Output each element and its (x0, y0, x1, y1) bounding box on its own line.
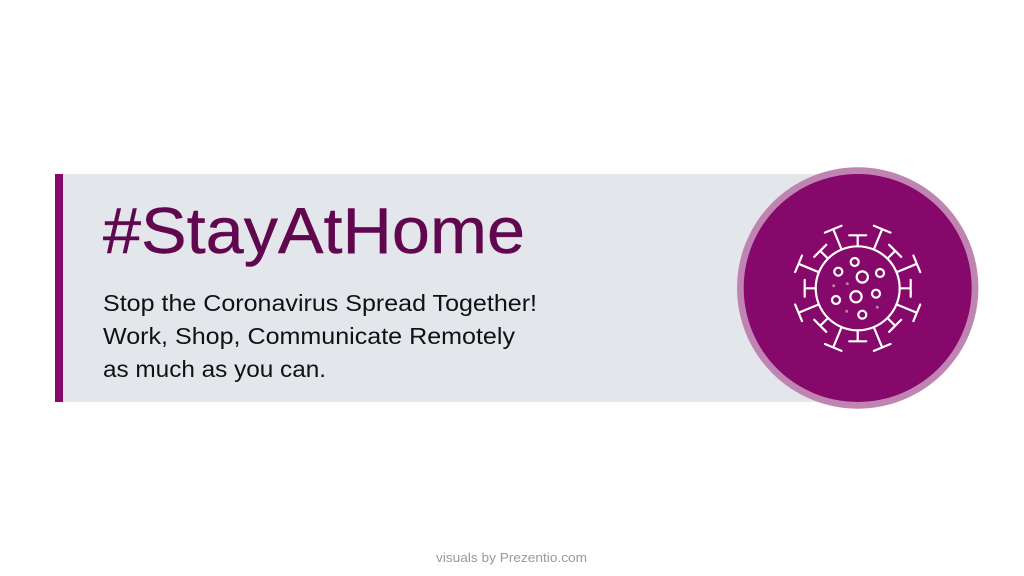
icon: coronavirus (795, 226, 920, 351)
accent bar (55, 174, 63, 402)
panel: banner background (55, 174, 860, 402)
icon: inner circle (744, 174, 972, 402)
title: #StayAtHome (103, 194, 525, 267)
footer credit: visuals by Prezentio.com (436, 550, 587, 565)
icon: outer circle ring (737, 167, 978, 409)
text block: message: as much as you can. (103, 356, 326, 382)
text block: message: Work, Shop, Communicate Remotely (103, 323, 516, 349)
text block: message (103, 290, 537, 382)
text block: message: Stop the Coronavirus Spread Together! (103, 290, 537, 316)
